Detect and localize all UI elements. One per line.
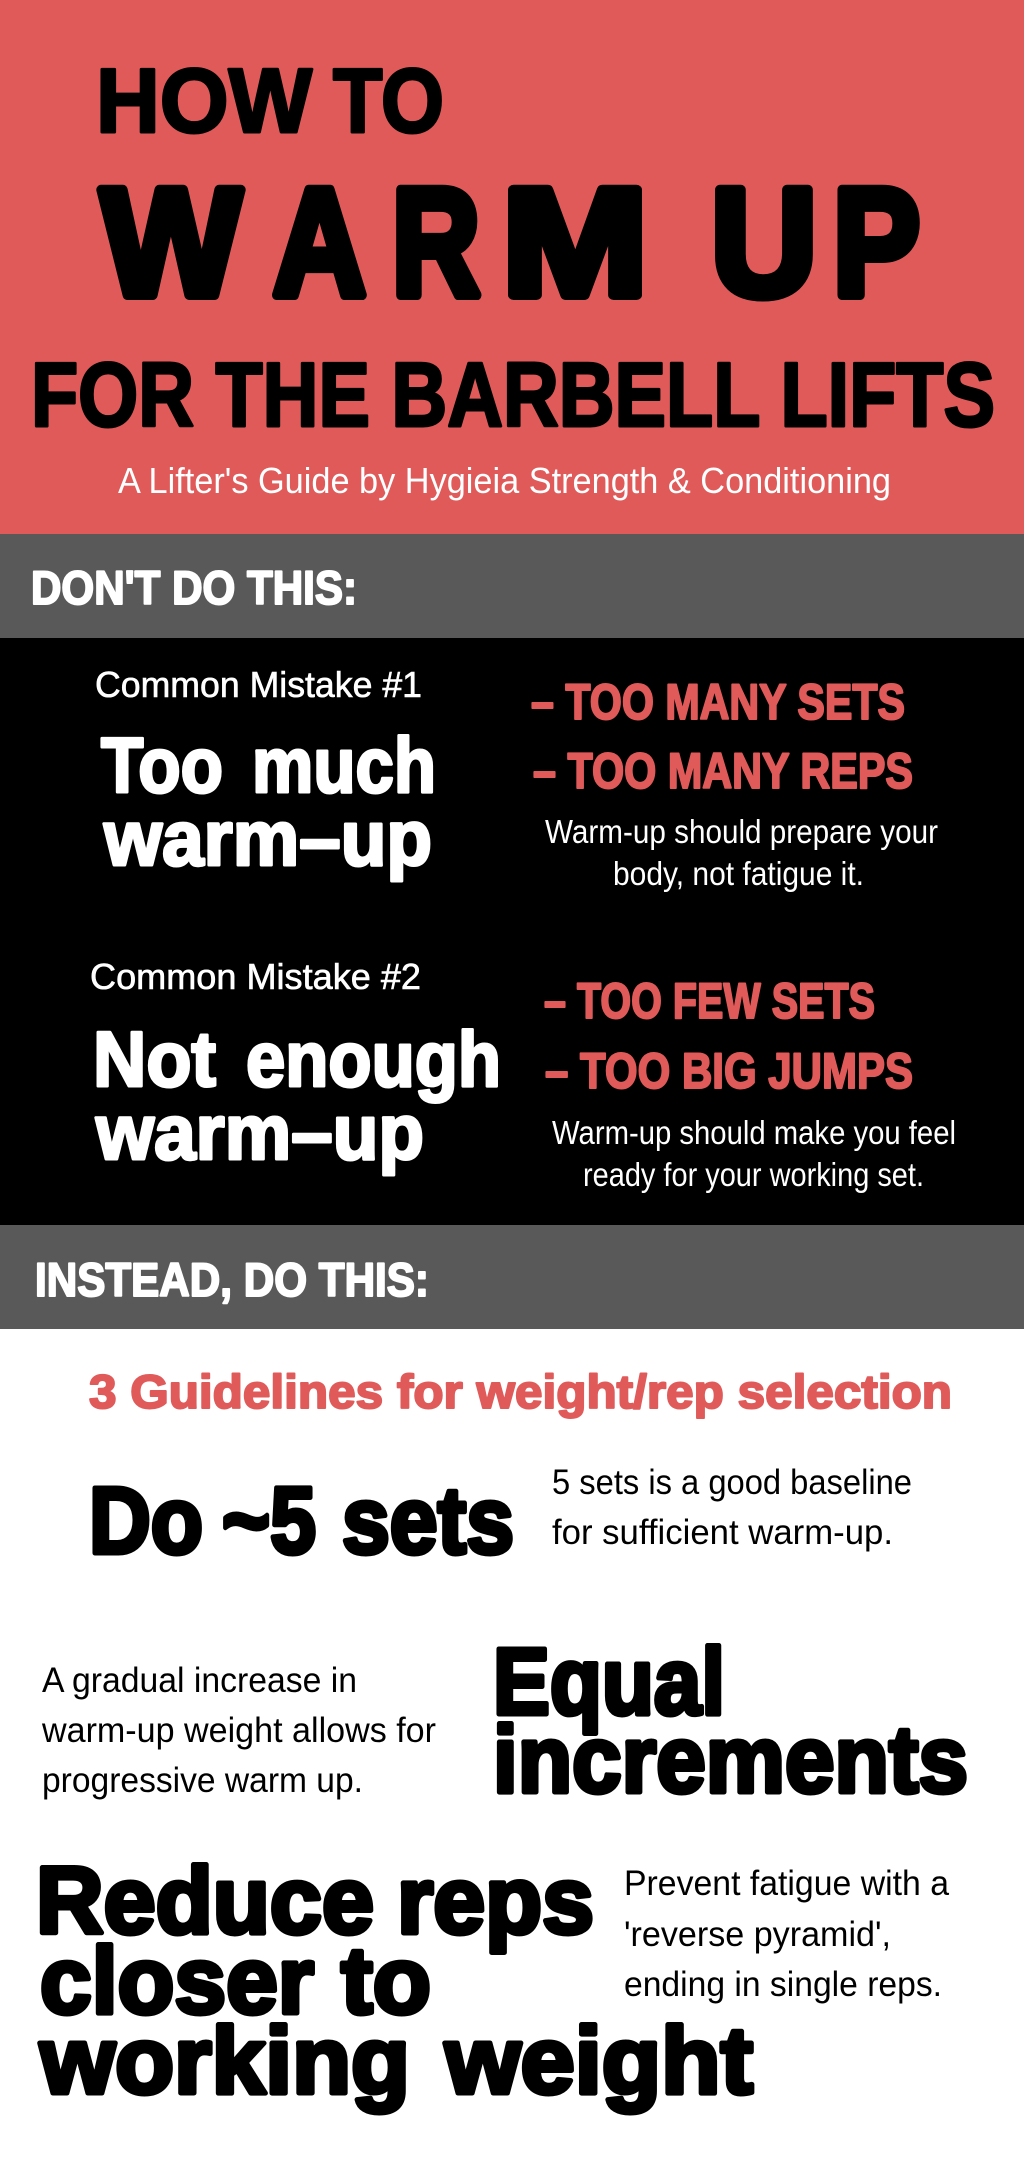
mistake 1 description [545, 813, 938, 892]
mistake 2 points: – TOO FEW SETS [544, 973, 875, 1029]
mistake 1 points: – TOO MANY REPS [533, 743, 913, 799]
guideline 1 description: 5 sets is a good baseline [552, 1463, 912, 1502]
guideline 3 title: weight [444, 2008, 753, 2114]
guideline 3 description: Prevent fatigue with a [624, 1864, 950, 1903]
guideline 1 title: sets [342, 1468, 514, 1574]
guideline 3 description: ending in single reps. [624, 1965, 942, 2004]
mistake 1 title: Too [101, 721, 223, 809]
mistake 2 title [93, 1015, 501, 1176]
guideline 1 description [552, 1463, 912, 1552]
guideline 2 description: progressive warm up. [42, 1761, 363, 1800]
title: warm up: R [392, 157, 480, 328]
guideline 3 description: 'reverse pyramid', [624, 1915, 891, 1954]
guideline 2 title: increments [493, 1707, 968, 1813]
guideline 1 title: Do [89, 1468, 203, 1574]
subtitle: A Lifter's Guide by Hygieia Strength & Conditioning [118, 460, 891, 501]
guideline 3 title [36, 1848, 753, 2114]
guideline 2 title [493, 1629, 968, 1813]
title: warm up: U [711, 157, 817, 328]
panel: header [0, 0, 1024, 534]
guideline 1 title: ~5 [222, 1468, 316, 1574]
mistake 1 points: – TOO MANY SETS [531, 674, 905, 730]
guideline 3 title: Reduce [36, 1848, 374, 1954]
mistake 1 title: warm–up [103, 794, 432, 882]
mistake 2 points: – TOO BIG JUMPS [545, 1043, 913, 1099]
mistake 2 label: Common Mistake #2 [90, 956, 421, 997]
mistake 1 description: body, not fatigue it. [613, 855, 864, 892]
guideline 3 title: to [341, 1928, 431, 2034]
mistake 1 points [531, 674, 913, 799]
guideline 1 description: for sufficient warm-up. [552, 1513, 893, 1552]
panel: guidelines [0, 1329, 1024, 2169]
mistake 2 title: Not [93, 1015, 216, 1103]
guideline 3 description [624, 1864, 950, 2004]
guideline 2 description [41, 1661, 436, 1800]
mistake 2 title: warm–up [95, 1088, 424, 1176]
panel: instead do this banner [0, 1225, 1024, 1329]
panel: common mistakes [0, 638, 1024, 1225]
guideline 2 title: Equal [493, 1629, 725, 1735]
mistake 2 title: enough [246, 1015, 501, 1103]
title: warm up: M [502, 157, 648, 328]
heading: instead do this: INSTEAD, DO THIS: [35, 1253, 429, 1306]
title: warm up: W [101, 157, 242, 328]
title: how to: TO [333, 51, 444, 152]
guideline 2 description: A gradual increase in [42, 1661, 357, 1700]
guideline 2 description: warm-up weight allows for [41, 1711, 436, 1750]
title: how to: HOW [96, 51, 312, 152]
heading: don't do this: DON'T DO THIS: [31, 561, 357, 614]
title: warm up: A [273, 157, 366, 328]
mistake 1 description: Warm-up should prepare your [545, 813, 938, 850]
panel: don't do this banner [0, 534, 1024, 638]
mistake 2 description: ready for your working set. [583, 1156, 924, 1193]
mistake 1 title: much [252, 721, 436, 809]
title: warm up: P [833, 157, 920, 328]
mistake 1 title [101, 721, 436, 882]
guideline 3 title: closer [40, 1928, 314, 2034]
mistake 2 description [552, 1114, 956, 1193]
mistake 1 label: Common Mistake #1 [95, 664, 422, 705]
guidelines heading: 3 Guidelines for weight/rep selection [89, 1365, 952, 1418]
guideline 3 title: reps [397, 1848, 594, 1954]
mistake 2 points [544, 973, 913, 1099]
mistake 2 description: Warm-up should make you feel [552, 1114, 956, 1151]
guideline 3 title: working [39, 2008, 410, 2114]
